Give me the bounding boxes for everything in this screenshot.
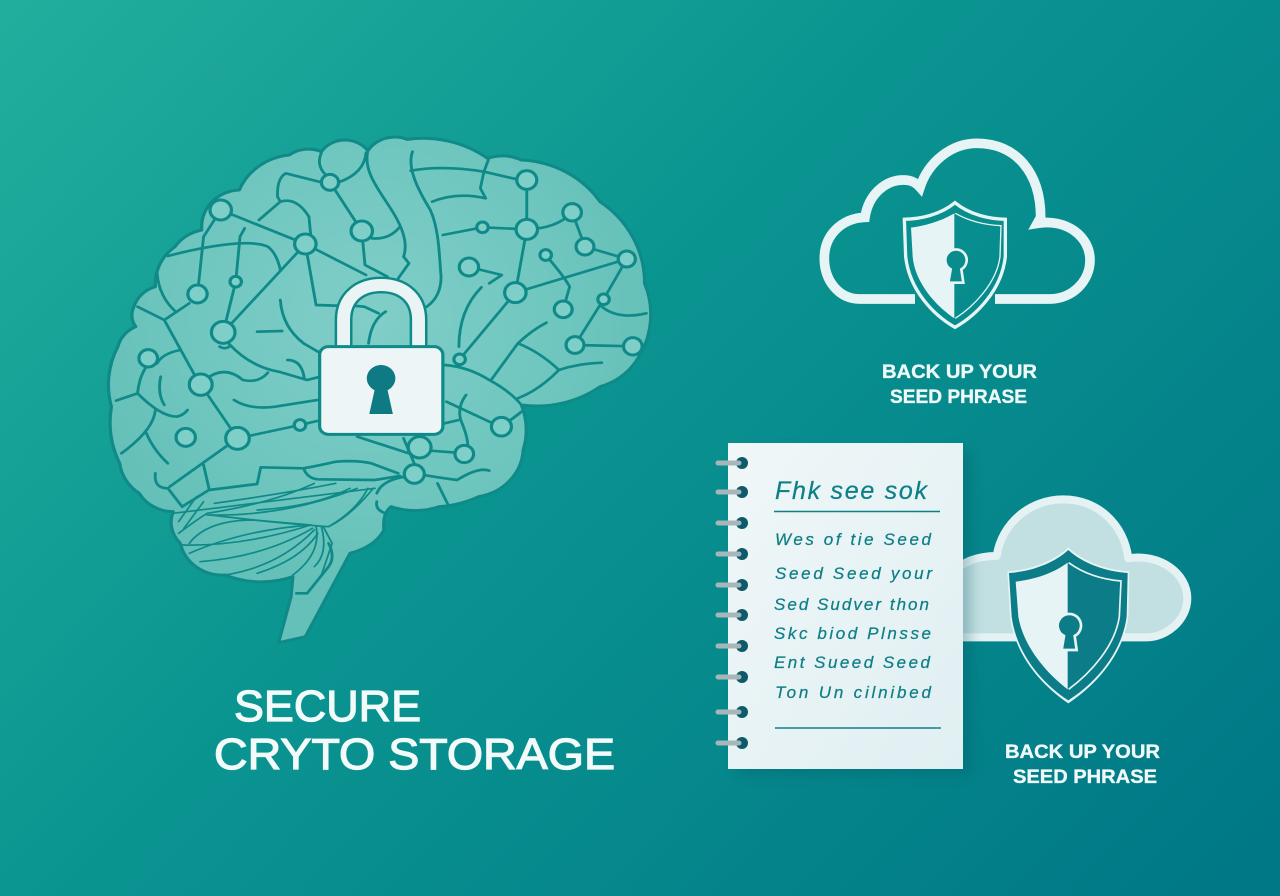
notebook text: Ent Sueed Seed xyxy=(774,653,931,672)
notebook page xyxy=(728,443,963,769)
icon: filled cloud with shield xyxy=(933,499,1187,703)
notebook text: Seed Seed your xyxy=(775,564,933,583)
notebook text: Ton Un cilnibed xyxy=(775,683,932,702)
spiral rings xyxy=(718,457,748,749)
icon: cloud outline with shield xyxy=(824,143,1090,327)
caption: back up bottom xyxy=(1005,741,1160,788)
notebook text: Skc biod Plnsse xyxy=(774,624,931,643)
circuit connectors xyxy=(170,180,633,487)
notebook text: Sed Sudver thon xyxy=(774,595,929,614)
shield light half xyxy=(911,213,954,318)
circuit nodes xyxy=(139,171,642,483)
cloud body xyxy=(933,499,1187,637)
caption: back up top: BACK UP YOUR xyxy=(882,361,1037,383)
panel: spiral notebook xyxy=(718,443,963,769)
shield right inner line xyxy=(955,213,1001,318)
brain silhouette xyxy=(108,137,651,643)
notebook shadow xyxy=(738,452,970,774)
shield right inner line xyxy=(1069,563,1121,689)
shield outline xyxy=(904,203,1005,327)
notebook text: Wes of tie Seed xyxy=(775,530,932,549)
title: CRYTO STORAGE xyxy=(214,730,615,779)
caption: back up top: SEED PHRASE xyxy=(890,386,1027,408)
shield teal band xyxy=(1009,550,1128,700)
notebook text xyxy=(774,477,933,702)
keyhole xyxy=(945,249,967,283)
illustration: brain with circuit network and padlock xyxy=(108,137,651,643)
title: SECURE xyxy=(234,682,421,731)
caption: back up top xyxy=(882,361,1037,408)
icon: padlock xyxy=(320,285,443,434)
title xyxy=(214,682,615,779)
shield light half xyxy=(1016,563,1068,689)
notebook text: Fhk see sok xyxy=(775,477,928,505)
caption: back up bottom: SEED PHRASE xyxy=(1013,766,1157,788)
caption: back up bottom: BACK UP YOUR xyxy=(1005,741,1160,763)
shield outer line xyxy=(1007,547,1129,703)
cloud outline xyxy=(824,143,1090,299)
cortex fold lines xyxy=(116,151,646,593)
keyhole xyxy=(1058,614,1081,650)
cerebellum folds xyxy=(173,483,375,575)
notebook rules xyxy=(774,512,941,728)
